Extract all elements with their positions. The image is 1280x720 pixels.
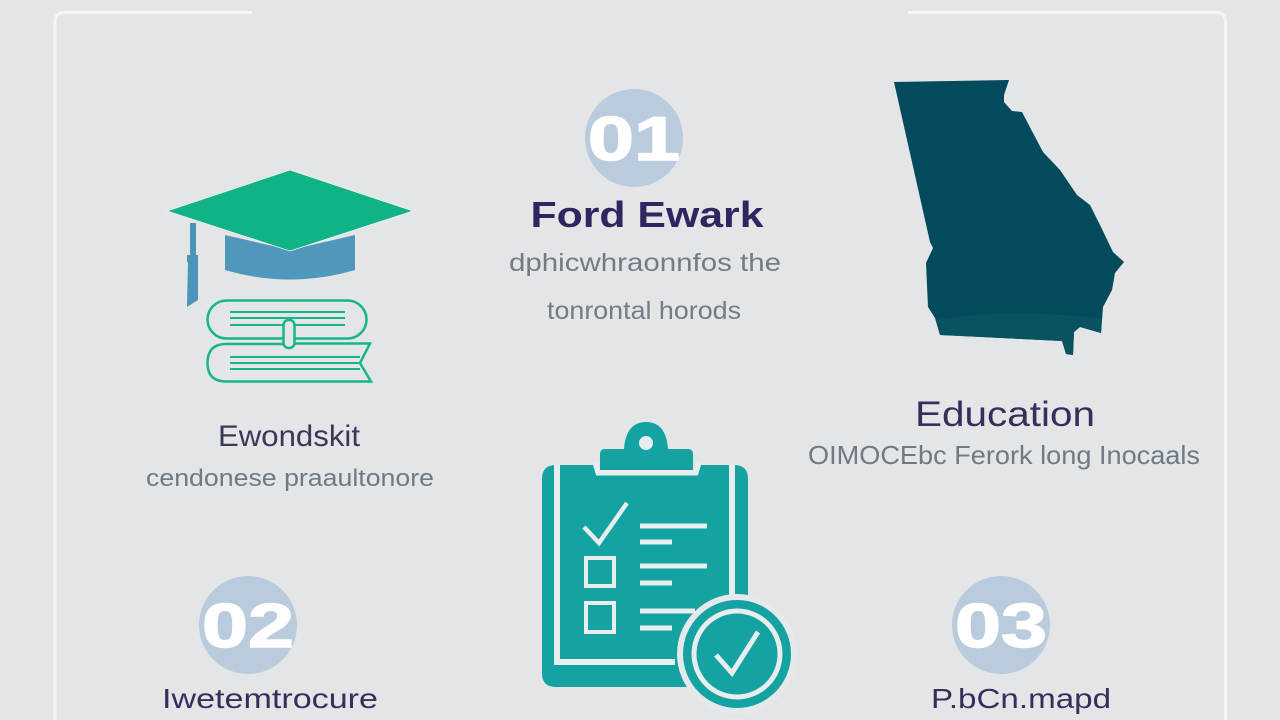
heading: Education: Education <box>915 395 1095 434</box>
heading: left label: Ewondskit <box>218 420 361 453</box>
heading: Ford Ewark: Ford Ewark <box>530 194 765 235</box>
description line 2: tonrontal horods <box>547 297 741 325</box>
description: Education: OIMOCEbc Ferork long Inocaals <box>808 440 1200 470</box>
heading: bottom left label: Iwetemtrocure <box>162 683 378 714</box>
text block: Education <box>808 395 1200 470</box>
icon: graduation cap and books <box>167 170 413 382</box>
badge: 02: 02 <box>202 592 294 661</box>
description: left label: cendonese praaultonore <box>146 465 434 492</box>
badge: 02 <box>199 576 297 674</box>
description line 1: dphicwhraonnfos the <box>509 249 781 277</box>
badge: 01 <box>585 89 683 187</box>
badge: 03: 03 <box>955 592 1047 661</box>
text block: Ford Ewark <box>509 194 781 325</box>
heading: bottom right label: P.bCn.mapd <box>931 683 1111 714</box>
icon: clipboard checklist <box>542 422 797 714</box>
badge: 01: 01 <box>588 105 680 174</box>
badge: 03 <box>952 576 1050 674</box>
icon: state map of Georgia <box>894 80 1124 355</box>
text block: left label <box>146 420 434 492</box>
